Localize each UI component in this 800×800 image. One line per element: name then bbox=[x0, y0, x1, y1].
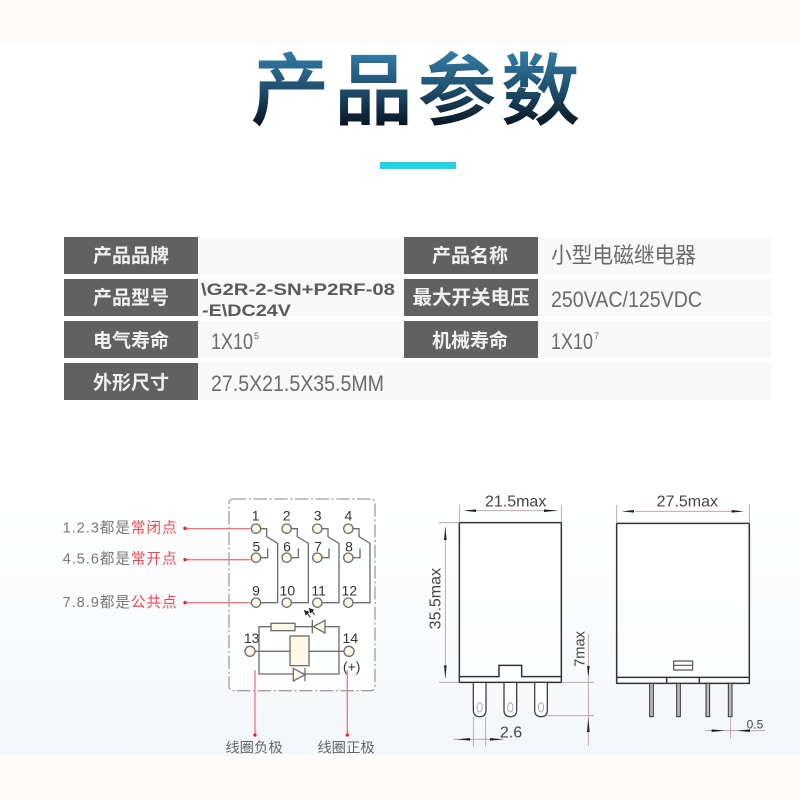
side view dimension drawing bbox=[427, 494, 594, 747]
terminal numbers: 1 bbox=[252, 508, 260, 524]
terminal numbers: 2 bbox=[283, 508, 291, 524]
blade pins bbox=[473, 683, 547, 717]
title: 产品参数 bbox=[251, 29, 585, 141]
row: electrical and mechanical life: 1X10 bbox=[211, 329, 253, 354]
contact legend: 1.2.3都是常闭点 bbox=[63, 520, 177, 537]
coil circuit bbox=[255, 620, 344, 681]
terminal numbers: 6 bbox=[283, 538, 291, 554]
pins bbox=[650, 683, 732, 717]
dimension labels: 2.6 bbox=[500, 724, 522, 741]
icon: LED light arrows bbox=[305, 609, 315, 617]
extension lines bbox=[439, 505, 594, 747]
row: electrical and mechanical life: 7 bbox=[594, 331, 599, 341]
terminal numbers: 12 bbox=[342, 582, 357, 598]
contact legend: 4.5.6都是常开点 bbox=[63, 551, 177, 568]
coil labels: 线圈正极 bbox=[317, 739, 375, 756]
row: brand and product name: 产品品牌 bbox=[93, 245, 169, 267]
dimension labels: 35.5max bbox=[427, 568, 444, 629]
dimension labels: 21.5max bbox=[485, 494, 546, 511]
row: model and max switching voltage: 最大开关电压 bbox=[412, 287, 530, 309]
terminal numbers: 10 bbox=[280, 582, 295, 598]
title accent bar bbox=[380, 162, 456, 169]
dimension labels: 0.5 bbox=[747, 718, 764, 732]
dimension labels: 27.5max bbox=[657, 494, 718, 511]
row: dimensions: 27.5X21.5X35.5MM bbox=[211, 371, 384, 396]
row: dimensions: 外形尺寸 bbox=[93, 372, 169, 394]
contact wiring bbox=[261, 529, 370, 603]
extension lines bbox=[617, 505, 765, 738]
wiring diagram bbox=[63, 499, 375, 756]
terminal numbers: 3 bbox=[314, 508, 322, 524]
front view dimension drawing bbox=[617, 494, 765, 738]
terminal numbers bbox=[244, 508, 360, 674]
terminal numbers: 13 bbox=[244, 630, 260, 646]
relay body bbox=[617, 523, 749, 683]
terminals bbox=[245, 524, 354, 656]
row: brand and product name: 产品名称 bbox=[432, 245, 508, 267]
terminal boundary bbox=[229, 499, 375, 691]
row: brand and product name bbox=[64, 237, 771, 274]
relay body bbox=[459, 523, 561, 682]
contact legend: 7.8.9都是公共点 bbox=[63, 594, 177, 611]
terminal numbers: 4 bbox=[344, 508, 352, 524]
coil labels: 线圈负极 bbox=[225, 739, 283, 756]
dimension labels bbox=[427, 494, 589, 741]
row: electrical and mechanical life: 机械寿命 bbox=[432, 329, 508, 352]
terminal numbers: 9 bbox=[252, 582, 260, 598]
row: model and max switching voltage bbox=[64, 279, 771, 320]
row: electrical and mechanical life: 1X10 bbox=[551, 329, 593, 354]
terminal numbers: 7 bbox=[314, 538, 322, 554]
row: electrical and mechanical life bbox=[64, 321, 771, 358]
terminal numbers: 8 bbox=[345, 538, 353, 554]
coil labels bbox=[225, 739, 375, 756]
terminal numbers: 11 bbox=[311, 582, 326, 598]
row: dimensions bbox=[64, 363, 771, 400]
terminal numbers: 5 bbox=[252, 538, 260, 554]
row: model and max switching voltage: -E\DC24V bbox=[202, 301, 292, 320]
row: electrical and mechanical life: 电气寿命 bbox=[93, 329, 169, 352]
arrowheads bbox=[444, 509, 590, 741]
terminal numbers: 14 bbox=[343, 630, 358, 646]
pin holes bbox=[477, 703, 544, 712]
arrowheads bbox=[622, 510, 750, 732]
contact legend bbox=[63, 520, 177, 611]
row: model and max switching voltage: 250VAC/125VDC bbox=[551, 287, 702, 312]
row: electrical and mechanical life: 5 bbox=[254, 331, 259, 341]
terminal numbers: (+) bbox=[343, 658, 360, 674]
latch slot bbox=[674, 661, 693, 670]
red leader lines bbox=[183, 527, 349, 737]
row: brand and product name: 小型电磁继电器 bbox=[551, 243, 696, 268]
row: model and max switching voltage: \G2R-2-SN+P2RF-08 bbox=[201, 280, 395, 299]
dimension labels: 7max bbox=[573, 630, 589, 667]
row: model and max switching voltage: 产品型号 bbox=[93, 287, 169, 309]
dimension labels bbox=[657, 494, 764, 732]
parameter table bbox=[64, 237, 771, 400]
